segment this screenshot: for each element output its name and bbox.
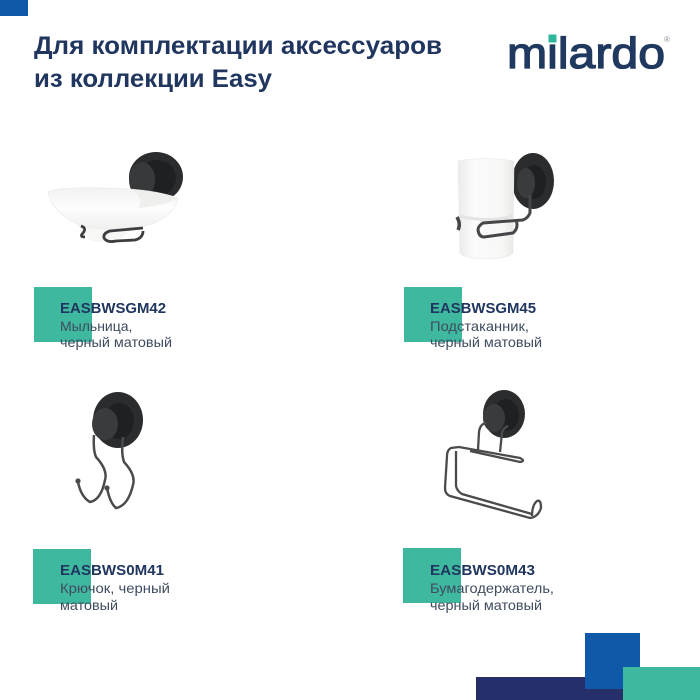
logo: milardo: milardo xyxy=(507,29,665,78)
product label: EASBWS0M43: EASBWS0M43 xyxy=(430,563,535,579)
product label: EASBWSGM42: EASBWSGM42 xyxy=(60,301,166,317)
product label: EASBWS0M43 xyxy=(403,548,554,613)
product label: EASBWSGM42: черный матовый xyxy=(60,334,172,350)
product label: EASBWS0M41 xyxy=(33,549,170,613)
product: glass holder xyxy=(457,153,554,259)
product: toilet paper holder xyxy=(445,390,541,518)
corner square: top left xyxy=(0,0,28,16)
title xyxy=(34,32,442,93)
logo: milardo: ® xyxy=(664,35,670,44)
product label: EASBWS0M43: Бумагодержатель, xyxy=(430,580,554,596)
product: soap dish xyxy=(48,152,183,242)
title: из коллекции Easy xyxy=(34,65,272,93)
product label: EASBWSGM45: Подстаканник, xyxy=(430,318,529,334)
product label: EASBWSGM45: EASBWSGM45 xyxy=(430,301,536,317)
product: double hook xyxy=(75,392,143,508)
product label: EASBWSGM42: Мыльница, xyxy=(60,318,132,334)
product label: EASBWSGM45 xyxy=(404,287,542,350)
product label: EASBWS0M41: EASBWS0M41 xyxy=(60,563,164,579)
product label: EASBWS0M41: матовый xyxy=(60,597,118,613)
product label: EASBWS0M43: черный матовый xyxy=(430,597,542,613)
title: Для комплектации аксессуаров xyxy=(34,32,442,60)
product label: EASBWS0M41: Крючок, черный xyxy=(60,580,170,596)
product label: EASBWSGM42 xyxy=(34,287,172,350)
product label: EASBWSGM45: черный матовый xyxy=(430,334,542,350)
corner blocks: bottom right xyxy=(476,633,700,700)
